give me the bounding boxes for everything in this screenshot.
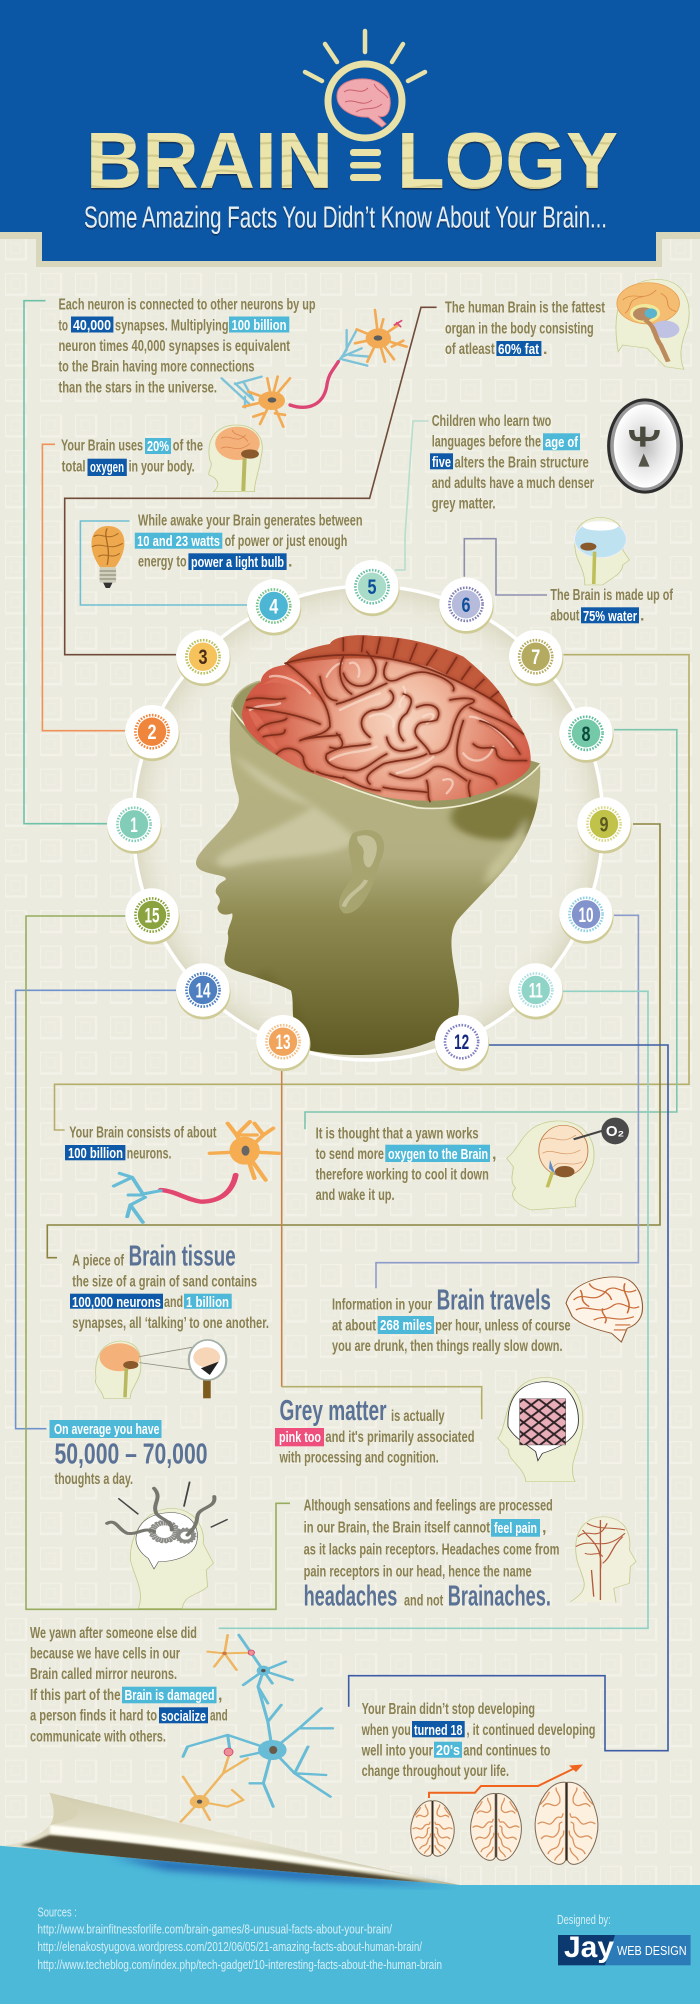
badge 9: 9 [600, 814, 608, 836]
connector 7 [54, 655, 689, 1130]
fact 7: 100 billion neurons: Your Brain consists of about [69, 1124, 217, 1141]
fact 11: grey matter: pink too [279, 1429, 321, 1446]
badge 11: 11 [529, 980, 543, 1002]
fact 9: brain tissue: 1 billion [186, 1294, 229, 1311]
header band [0, 0, 700, 267]
fact 15: brain development: 20's [436, 1742, 460, 1759]
fact 1: neuron connections: than the stars in the universe. [58, 379, 217, 396]
badge 6: 6 [462, 594, 470, 617]
sources: Sources : [38, 1905, 77, 1920]
connector 12 [349, 1045, 668, 1751]
fact 12: thoughts: 50,000 – 70,000 [54, 1438, 208, 1470]
fact 11: grey matter: with processing and cognition. [279, 1450, 439, 1467]
fact 14: mirror neurons: Brain is damaged [124, 1687, 214, 1704]
fact 5: bilingual children: languages before the [432, 434, 541, 451]
fact 1: neuron connections: to [58, 317, 68, 334]
fact 2: oxygen: 20% [147, 438, 169, 455]
connector 13 [282, 1060, 482, 1419]
fact 13: no pain receptors: , [542, 1520, 546, 1537]
brain [242, 635, 531, 802]
fact 6: water: about [550, 608, 580, 625]
badge 8 [559, 707, 614, 763]
badge 11 [509, 963, 563, 1020]
connector 11 [219, 991, 648, 1628]
title: LOGY [397, 116, 618, 205]
badge 10: 10 [578, 904, 594, 927]
fact 10: brain travels: per hour, unless of course [435, 1318, 571, 1335]
badge 9 [577, 797, 632, 854]
fact 10: brain travels [332, 1277, 643, 1355]
fact 13: no pain receptors: pain receptors in our head, hence the name [304, 1563, 532, 1580]
designer credit: Jay [564, 1931, 614, 1964]
fact 4: watts: of power or just enough [225, 533, 347, 550]
badge 5 [345, 560, 400, 616]
fact 3: fat: The human Brain is the fattest [445, 299, 605, 316]
fact 2: oxygen: Your Brain uses [61, 438, 143, 455]
icon: head and magnifier [95, 1340, 226, 1398]
designer credit: Designed by: [557, 1912, 611, 1927]
fact 11: grey matter: Grey matter [280, 1395, 386, 1427]
sources: http://www.techeblog.com/index.php/tech-gadget/10-interesting-facts-about-the-human-brain [38, 1957, 442, 1972]
page curl [0, 1790, 467, 1890]
icon: neuron [114, 1122, 279, 1222]
icon: head with brain [209, 425, 262, 492]
fact 4: watts [91, 512, 362, 588]
fact 12: thoughts: thoughts a day. [54, 1471, 133, 1488]
title: BRAIN [86, 116, 333, 205]
fact 2: oxygen [61, 425, 262, 492]
fact 14: mirror neurons: Brain called mirror neurons. [30, 1666, 177, 1683]
connector 6 [464, 539, 547, 595]
fact 14: mirror neurons: If this part of the [30, 1687, 121, 1704]
fact 8: yawn [316, 1118, 629, 1210]
fact 9: brain tissue: synapses, all ‘talking’ to one another. [72, 1315, 269, 1332]
fact 13: no pain receptors: feel pain [494, 1520, 537, 1537]
fact 4: watts: While awake your Brain generates between [138, 512, 362, 529]
connector 2 [42, 444, 125, 731]
fact 14: mirror neurons: and [210, 1708, 228, 1725]
fact 2: oxygen: oxygen [90, 459, 124, 476]
fact 7: 100 billion neurons: neurons. [127, 1145, 171, 1162]
fact 5: bilingual children: Children who learn two [432, 413, 551, 430]
ear [339, 830, 384, 914]
fact 12: thoughts [50, 1420, 228, 1608]
fact 9: brain tissue: Brain tissue [129, 1241, 236, 1273]
fact 13: no pain receptors: headaches [304, 1580, 397, 1612]
fact 10: brain travels: Brain travels [437, 1285, 551, 1317]
fact 3: fat: 60% fat [498, 341, 539, 358]
fact 4: watts: power a light bulb [191, 554, 284, 571]
fact 13: no pain receptors: Brainaches. [448, 1580, 551, 1612]
sources: http://www.brainfitnessforlife.com/brain-games/8-unusual-facts-about-your-brain/ [38, 1921, 392, 1936]
fact 6: water [550, 517, 673, 625]
fact 12: thoughts: On average you have [54, 1421, 159, 1438]
badge 4 [247, 579, 301, 636]
fact 9: brain tissue: A piece of [72, 1253, 124, 1270]
icon: light bulb with brain [305, 31, 425, 181]
badge 5: 5 [368, 576, 377, 599]
icon: head with pink pattern [498, 1377, 583, 1482]
fact 11: grey matter [275, 1377, 583, 1482]
fact 15: brain development: turned 18 [414, 1722, 462, 1739]
icon: nerve head [570, 1517, 636, 1603]
fact 14: mirror neurons [30, 1625, 333, 1822]
fact 15: brain development: well into your [361, 1742, 433, 1759]
fact 7: 100 billion neurons: 100 billion [68, 1145, 123, 1162]
fact 8: yawn: and wake it up. [316, 1187, 395, 1204]
fact 13: no pain receptors: as it lacks pain receptors. Headaches come from [304, 1541, 559, 1558]
ring around head [133, 586, 603, 1060]
fact 14: mirror neurons: We yawn after someone else did [30, 1625, 197, 1642]
badge 8: 8 [582, 723, 591, 746]
fact 3: fat: . [543, 341, 547, 358]
badge 12 [435, 1015, 489, 1071]
fact 11: grey matter: and it's primarily associated [325, 1429, 474, 1446]
brain and skull rim [232, 635, 541, 808]
badge 7: 7 [531, 646, 540, 669]
badge 15: 15 [144, 904, 160, 928]
icon: brain scan [607, 398, 683, 494]
icon: mirror neurons [181, 1635, 333, 1822]
connector 10 [376, 915, 638, 1288]
badge 3 [176, 630, 230, 686]
fact 1: neuron connections [58, 296, 407, 427]
fact 5: bilingual children: alters the Brain structure [454, 454, 589, 471]
connector 1 [24, 301, 107, 824]
footer panel [0, 1790, 700, 2004]
badge 3: 3 [198, 646, 208, 669]
fact 14: mirror neurons: socialize [161, 1708, 206, 1725]
icon: three growing brains with arrow [411, 1764, 598, 1864]
connector 3 [65, 307, 437, 655]
fact 9: brain tissue: the size of a grain of sand contains [72, 1274, 257, 1291]
fact 1: neuron connections: 40,000 [73, 317, 111, 334]
connector 9 [47, 824, 660, 1258]
badge 4: 4 [269, 596, 278, 618]
fact 15: brain development: Your Brain didn’t stop developing [362, 1701, 535, 1718]
connector 14 [16, 990, 176, 1429]
fact 4: watts: 10 and 23 watts [137, 533, 220, 550]
fact 8: yawn: to send more [316, 1146, 384, 1163]
fact 8: yawn: oxygen to the Brain [388, 1146, 488, 1163]
head with exposed brain [196, 635, 549, 1055]
sources [38, 1905, 442, 1972]
fact 15: brain development: and continues to [463, 1742, 551, 1759]
fact 15: brain development: change throughout your life. [362, 1763, 509, 1780]
badge 1 [107, 798, 162, 854]
connectors [16, 301, 689, 1751]
fact 1: neuron connections: 100 billion [232, 317, 286, 334]
fact 5: bilingual children [430, 398, 683, 513]
fact 1: neuron connections: neuron times 40,000 synapses is equivalent [58, 338, 290, 355]
fact 4: watts: . [288, 554, 292, 571]
fact 2: oxygen: of the [173, 438, 203, 455]
fact 3: fat [445, 279, 689, 369]
fact 8: yawn: , [492, 1146, 496, 1163]
fact 14: mirror neurons: a person finds it hard to [30, 1708, 157, 1725]
fact 5: bilingual children: grey matter. [432, 496, 496, 513]
connector 4 [80, 521, 248, 605]
fact 7: 100 billion neurons [65, 1122, 279, 1222]
title [86, 116, 618, 205]
fact 14: mirror neurons: communicate with others. [30, 1728, 166, 1745]
fact 13: no pain receptors: Although sensations and feelings are processed [304, 1498, 553, 1515]
fact 1: neuron connections: Each neuron is connected to other neurons by up [58, 296, 316, 314]
fact 3: fat: organ in the body consisting [445, 320, 594, 337]
connector 15 [26, 916, 290, 1609]
badge 13 [256, 1015, 310, 1071]
fact 10: brain travels: you are drunk, then things really slow down. [332, 1338, 562, 1355]
fact 5: bilingual children: age of [545, 434, 579, 451]
fact 13: no pain receptors [304, 1498, 636, 1612]
designer credit: WEB DESIGN [617, 1943, 687, 1958]
badge 7 [509, 630, 563, 686]
icon: brain light bulb [91, 526, 124, 588]
fact 9: brain tissue: and [164, 1294, 183, 1311]
fact 10: brain travels: at about [332, 1318, 376, 1335]
fact 5: bilingual children: five [432, 454, 451, 471]
fact 9: brain tissue [70, 1241, 269, 1398]
fact 3: fat: of atleast [445, 341, 495, 358]
fact 1: neuron connections: synapses. Multiplying [115, 317, 228, 334]
fact 6: water: . [640, 608, 644, 625]
fact 15: brain development [361, 1701, 598, 1864]
fact 8: yawn: therefore working to cool it down [316, 1167, 489, 1184]
badge 14: 14 [196, 980, 211, 1002]
icon: head with O2: O₂ [606, 1123, 624, 1140]
icon: head cross-section [616, 279, 689, 369]
badge 14 [176, 963, 230, 1020]
connector 8 [305, 730, 677, 1129]
blue shadow under curl [110, 1856, 457, 1887]
fact 14: mirror neurons: because we have cells in our [30, 1646, 180, 1663]
badge 12: 12 [454, 1031, 469, 1054]
icon: head with gears [107, 1482, 228, 1608]
icon: brain side view [566, 1277, 643, 1342]
fact 10: brain travels: 268 miles [380, 1317, 432, 1334]
fact 15: brain development: when you [361, 1722, 411, 1739]
fact 4: watts: energy to [138, 554, 187, 571]
badge 10 [559, 888, 614, 944]
badge 6 [439, 578, 494, 634]
fact 14: mirror neurons: , [218, 1687, 222, 1704]
designer credit [557, 1912, 691, 1965]
badge 1: 1 [130, 814, 138, 837]
fact 2: oxygen: total [62, 459, 86, 476]
badge 2: 2 [148, 721, 156, 744]
icon: neuron [222, 310, 407, 427]
fact 11: grey matter: is actually [391, 1408, 445, 1425]
icon: head with watery brain [575, 517, 629, 585]
fact 15: brain development: , it continued developing [466, 1722, 596, 1739]
fact 9: brain tissue: 100,000 neurons [72, 1294, 161, 1311]
fact 13: no pain receptors: and not [404, 1592, 444, 1609]
fact 8: yawn: It is thought that a yawn works [316, 1125, 479, 1142]
skull cup interior and rim [232, 681, 541, 808]
fact 1: neuron connections: to the Brain having more connections [58, 359, 255, 376]
fact 13: no pain receptors: in our Brain, the Brain itself cannot [304, 1520, 490, 1537]
fact 2: oxygen: in your body. [129, 459, 195, 476]
fact 10: brain travels: Information in your [332, 1297, 432, 1314]
connector 5 [395, 421, 429, 570]
icon: head with O2 [507, 1118, 629, 1210]
fact 6: water: 75% water [583, 608, 637, 625]
head silhouette [196, 707, 549, 1055]
badge 13: 13 [276, 1031, 290, 1054]
badge 2 [125, 705, 180, 761]
fact 5: bilingual children: and adults have a much denser [432, 475, 594, 492]
sources: http://elenakostyugova.wordpress.com/2012/06/05/21-amazing-facts-about-human-brain/ [38, 1939, 422, 1954]
badge 15 [125, 888, 180, 944]
